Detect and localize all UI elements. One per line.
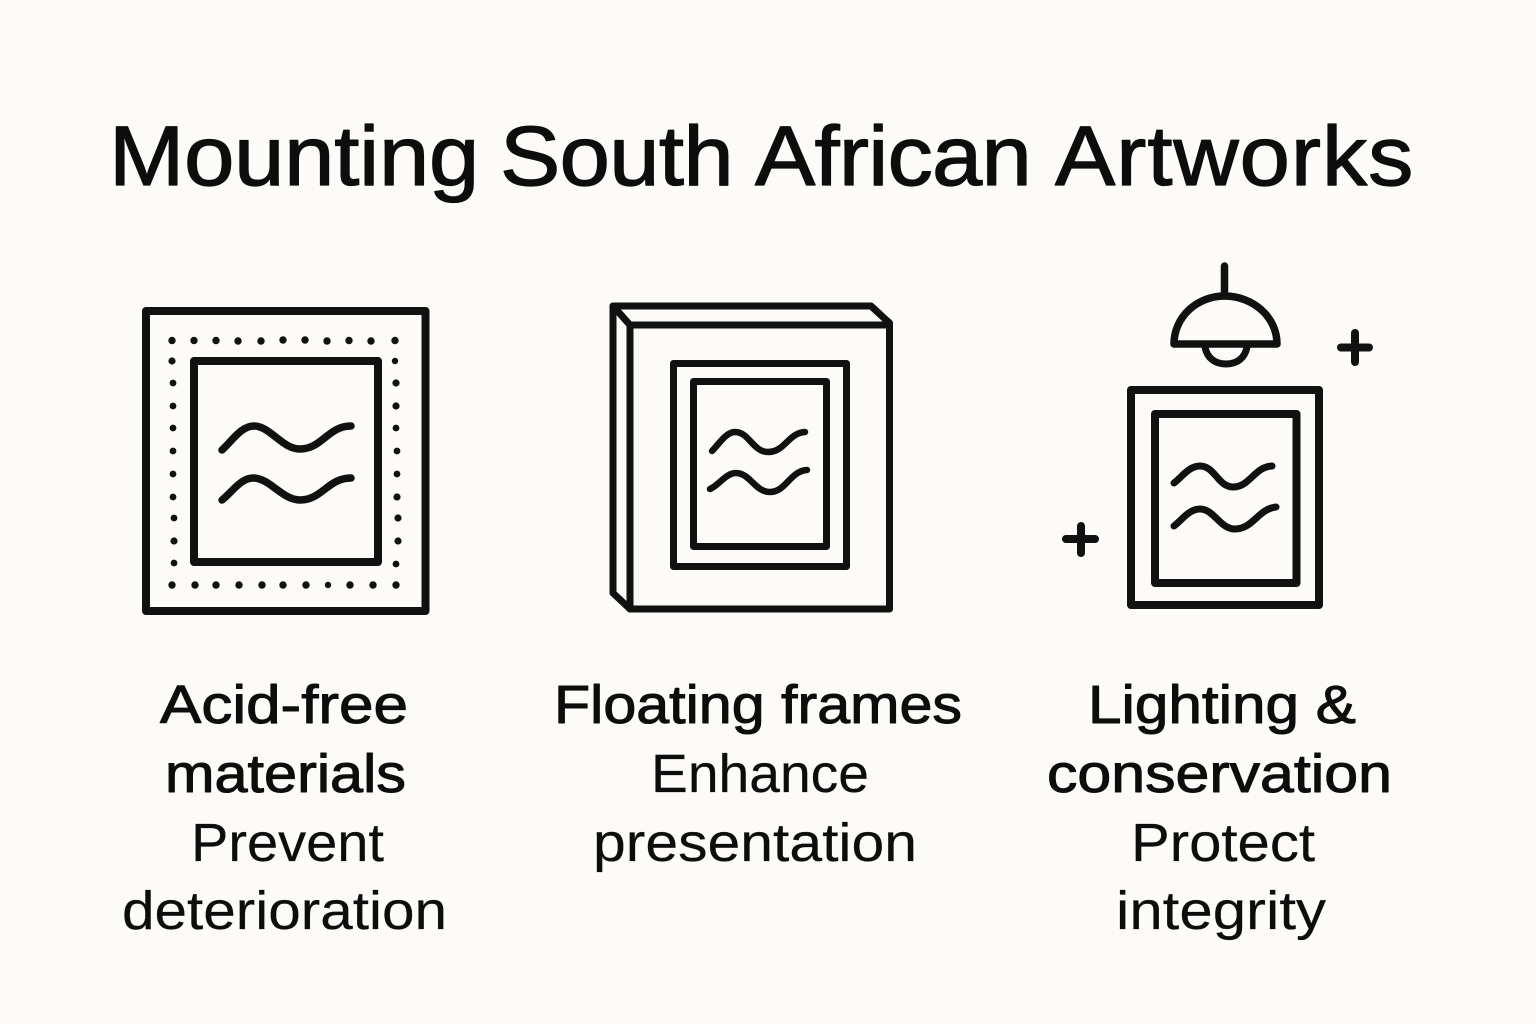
description: integrity: integrity	[1116, 881, 1326, 941]
description: prevent: Prevent	[191, 813, 384, 873]
description: deterioration: deterioration	[122, 881, 447, 941]
title: Artworks	[1055, 110, 1414, 203]
description: presentation: presentation	[593, 813, 917, 873]
text block: lighting and conservation	[1047, 675, 1392, 941]
icon: floating frame	[613, 306, 890, 609]
heading: materials: materials	[165, 744, 406, 804]
icon: acid-free mat with dotted border	[146, 311, 426, 611]
text block: acid-free materials	[122, 675, 447, 941]
title: Mounting	[109, 110, 504, 203]
text block: floating frames	[554, 675, 962, 873]
description: enhance: Enhance	[651, 744, 869, 804]
title: African	[755, 110, 1055, 203]
heading: conservation: conservation	[1047, 744, 1392, 804]
heading: floating frames: Floating frames	[554, 675, 962, 735]
title: South	[500, 110, 757, 203]
heading: acid-free: Acid-free	[160, 675, 408, 735]
heading: lighting &: Lighting &	[1088, 675, 1356, 735]
icon: lamp above framed artwork with sparkles	[1066, 266, 1369, 605]
description: protect: Protect	[1131, 813, 1315, 873]
